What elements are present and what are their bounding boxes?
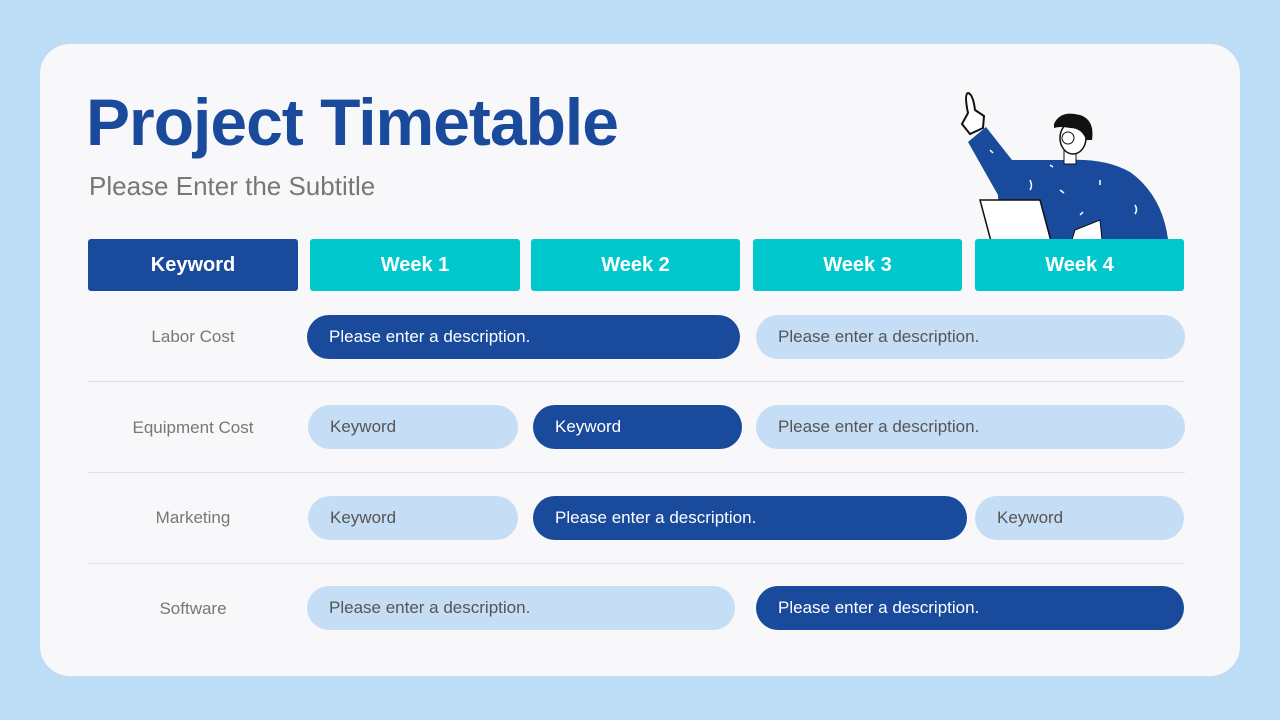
bar dark: Please enter a description. bbox=[329, 327, 530, 346]
header: week 3 bbox=[753, 239, 962, 291]
row: software bbox=[159, 586, 1184, 630]
bar dark: Please enter a description. bbox=[555, 508, 756, 527]
header: week 4 bbox=[975, 239, 1184, 291]
bar light bbox=[308, 405, 518, 449]
bar light bbox=[756, 315, 1185, 359]
row: marketing bbox=[156, 496, 1184, 540]
bar dark bbox=[533, 496, 967, 540]
header: week 1: Week 1 bbox=[381, 254, 449, 276]
bar light bbox=[307, 586, 735, 630]
bar light: Keyword bbox=[997, 508, 1063, 527]
bar dark: Please enter a description. bbox=[778, 598, 979, 617]
label: Labor Cost bbox=[151, 327, 235, 346]
bar dark bbox=[533, 405, 742, 449]
bar light: Please enter a description. bbox=[778, 417, 979, 436]
header: keyword: Keyword bbox=[151, 254, 235, 276]
bar light: Please enter a description. bbox=[329, 598, 530, 617]
bar light: Please enter a description. bbox=[778, 327, 979, 346]
header: week 2 bbox=[531, 239, 740, 291]
header row bbox=[88, 239, 1184, 291]
bar light: Keyword bbox=[330, 508, 396, 527]
header: week 3: Week 3 bbox=[823, 254, 892, 276]
header: keyword bbox=[88, 239, 298, 291]
bar light bbox=[308, 496, 518, 540]
bar dark: Keyword bbox=[555, 417, 621, 436]
bar dark bbox=[756, 586, 1184, 630]
label: Marketing bbox=[156, 508, 230, 527]
label: Equipment Cost bbox=[133, 418, 253, 437]
header: week 2: Week 2 bbox=[601, 254, 670, 276]
row: labor cost bbox=[151, 315, 1185, 359]
header: week 1 bbox=[310, 239, 520, 291]
header: week 4: Week 4 bbox=[1045, 254, 1114, 276]
bar dark bbox=[307, 315, 740, 359]
bar light bbox=[975, 496, 1184, 540]
bar light: Keyword bbox=[330, 417, 396, 436]
bar light bbox=[756, 405, 1185, 449]
label: Software bbox=[159, 599, 227, 618]
title: Project Timetable bbox=[86, 85, 618, 159]
subtitle: Please Enter the Subtitle bbox=[89, 171, 375, 201]
row: equipment cost bbox=[133, 405, 1185, 449]
illustration: person pointing bbox=[960, 92, 1168, 239]
